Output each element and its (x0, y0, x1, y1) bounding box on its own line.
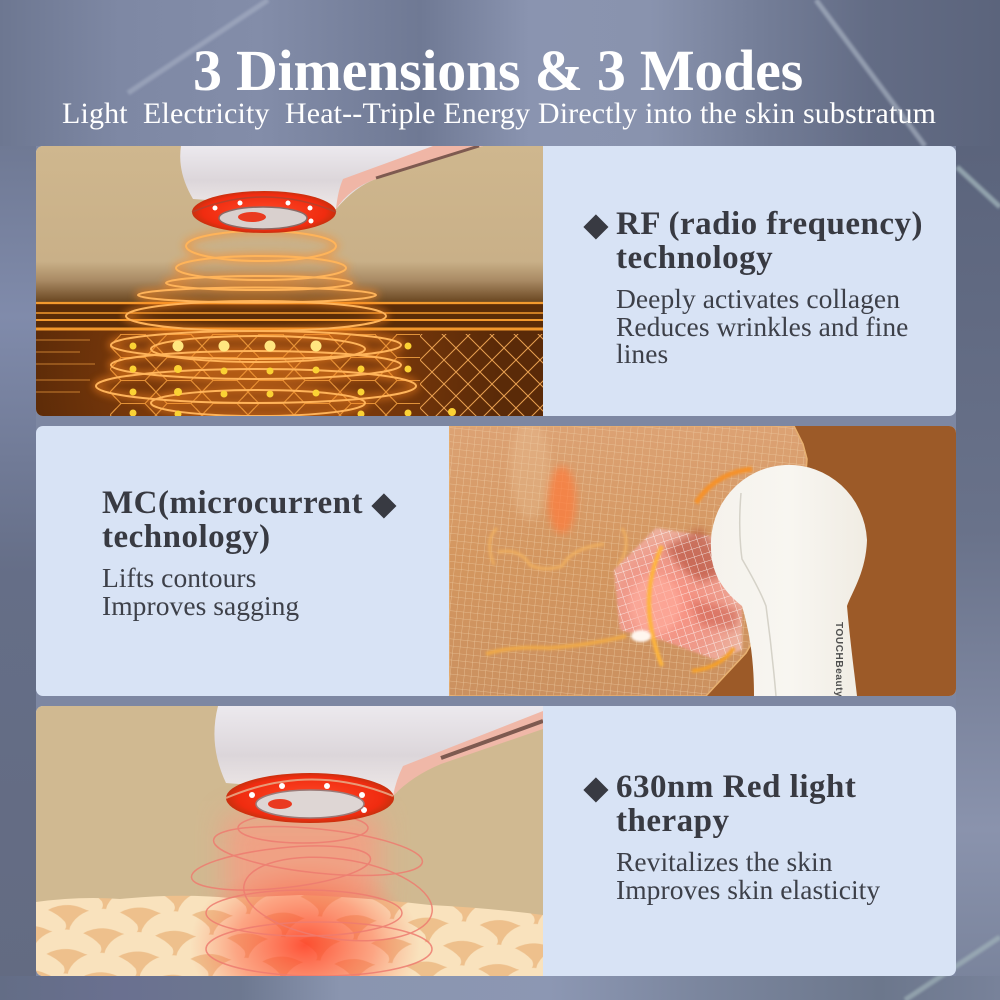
title: 3 Dimensions & 3 Modes (193, 38, 803, 103)
lips contour (486, 636, 626, 654)
red light heading: 630nm Red light (616, 769, 856, 805)
RF heading: ◆ (584, 207, 608, 242)
device head (214, 706, 543, 823)
device head (180, 146, 483, 233)
skin layer lines (36, 303, 543, 329)
light particles (130, 340, 456, 418)
RF illustration (36, 146, 543, 416)
red light heading: ◆ (584, 770, 608, 805)
energy rings (96, 231, 416, 416)
MC illustration (449, 426, 956, 696)
panel: red light therapy (36, 706, 956, 976)
red light description (616, 846, 880, 905)
treated area (614, 469, 760, 671)
panel: RF technology (36, 146, 956, 416)
MC heading: technology) (102, 519, 271, 555)
RF heading: RF (radio frequency) (616, 206, 923, 242)
red light description: Revitalizes the skin (616, 846, 833, 877)
RF heading: technology (616, 240, 773, 276)
RF description (616, 283, 908, 369)
knitted skin texture (36, 895, 543, 976)
MC heading (102, 485, 396, 555)
RF description: lines (616, 338, 668, 369)
RF description: Reduces wrinkles and fine (616, 311, 908, 342)
MC description (102, 562, 299, 621)
MC description: Improves sagging (102, 590, 299, 621)
MC heading: MC(microcurrent (102, 485, 363, 521)
MC heading: ◆ (372, 486, 396, 521)
RF heading (584, 206, 923, 276)
MC description: Lifts contours (102, 562, 256, 593)
red light heading (584, 769, 856, 839)
nose contour (490, 528, 626, 569)
device handle (711, 465, 867, 697)
red light description: Improves skin elasticity (616, 874, 880, 905)
red light heading: therapy (616, 803, 730, 839)
subtitle: Light Electricity Heat--Triple Energy Directly into the skin substratum (62, 97, 936, 130)
red light illustration (36, 706, 543, 976)
RF description: Deeply activates collagen (616, 283, 900, 314)
brand text: TOUCHBeauty (833, 622, 844, 696)
light rings (189, 813, 438, 976)
panel: MC technology (36, 426, 956, 696)
